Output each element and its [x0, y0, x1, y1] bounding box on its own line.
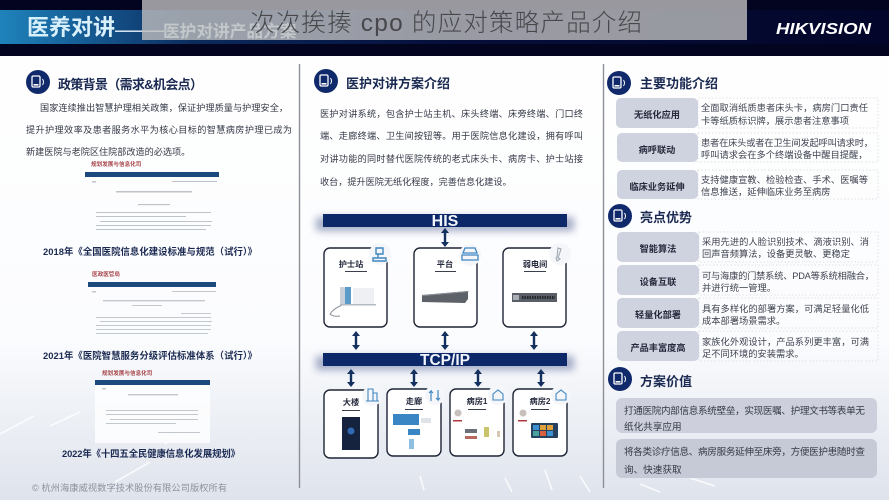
document 2018 — [85, 160, 219, 230]
box: corridor — [387, 385, 445, 456]
architecture diagram — [316, 213, 574, 458]
row: lightweight deployment: 成本部署场景需求。 — [702, 315, 785, 326]
header banner — [0, 0, 889, 56]
row: clinical extension: 临床业务延伸 — [629, 181, 685, 192]
arrow: network to TCP/IP — [530, 331, 538, 350]
document 2022 — [95, 369, 210, 443]
policy paragraph — [26, 102, 292, 157]
panel: main functions — [607, 71, 878, 199]
row: smart algorithm: 智能算法 — [640, 243, 676, 254]
arrow: TCP/IP to ward 2 — [537, 369, 545, 387]
panel: solution value — [608, 367, 877, 478]
row: device interconnection: 可与海康的门禁系统、PDA等系统相融合， — [702, 270, 874, 281]
header connector line — [115, 30, 164, 32]
TCP/IP bar: TCP/IP — [420, 352, 470, 369]
row: call linkage: 病呼联动 — [639, 144, 675, 155]
policy paragraph: 国家连续推出智慧护理相关政策，保证护理质量与护理安全， — [40, 102, 288, 113]
arrow: TCP/IP to ward 1 — [474, 369, 482, 387]
icon: highlights device — [608, 204, 632, 228]
value card: extend services: 询、快速获取 — [624, 464, 682, 476]
HIKVISION logo: HIKVISION — [776, 21, 872, 38]
document 2021: 医政医管局 — [92, 270, 120, 278]
row: smart algorithm: 回声音频算法，设备更灵敏、更稳定 — [702, 248, 850, 259]
row: call linkage: 呼叫请求会在多个终端设备中醒目提醒， — [701, 149, 868, 160]
box: corridor: 走廊 — [406, 396, 422, 406]
caption 2022: 2022年《十四五全民健康信息化发展规划》 — [62, 448, 240, 459]
policy paragraph: 提升护理效率及患者服务水平为核心目标的智慧病房护理已成为 — [26, 124, 292, 135]
box: platform: 平台 — [437, 259, 453, 269]
value card: break data silos: 纸化共享应用 — [624, 421, 682, 433]
panel: policy background — [26, 70, 292, 459]
row: paperless application — [616, 98, 878, 128]
value card: break data silos: 打通医院内部信息系统壁垒，实现医嘱、护理文书等表单无 — [624, 405, 865, 417]
column dividers — [300, 64, 604, 488]
solution paragraph — [320, 108, 583, 187]
panel: solution introduction — [314, 69, 583, 458]
arrow: HIS to platform — [441, 228, 449, 247]
row: call linkage: 患者在床头或者在卫生间发起呼叫请求时， — [701, 137, 873, 148]
value card: extend services — [616, 439, 877, 478]
overlay title bar — [142, 0, 747, 40]
row: clinical extension: 信息推送，延伸临床业务至病房 — [701, 186, 830, 197]
icon: value device — [608, 367, 632, 391]
box: nurse station: 护士站 — [339, 259, 363, 269]
value card: break data silos — [616, 398, 877, 433]
icon: policy device — [26, 70, 50, 94]
copyright footer: © 杭州海康威视数字技术股份有限公司版权所有 — [32, 482, 227, 493]
overlay title bar: 次次挨揍 cpo 的应对策略产品介绍 — [250, 9, 642, 37]
policy paragraph: 新建医院与老院区住院部改造的必选项。 — [26, 146, 190, 157]
heading: main functions: 主要功能介绍 — [640, 76, 718, 91]
row: lightweight deployment: 具有多样化的部署方案，可满足轻量化低 — [702, 303, 869, 314]
arrow: platform to TCP/IP — [441, 331, 449, 350]
box: ward 1 — [450, 385, 508, 456]
heading: solution introduction: 医护对讲方案介绍 — [346, 76, 450, 91]
caption 2021: 2021年《医院智慧服务分级评估标准体系（试行）》 — [43, 350, 257, 361]
row: lightweight deployment: 轻量化部署 — [635, 309, 681, 320]
row: device interconnection — [617, 265, 878, 295]
header subtitle: 医护对讲产品方案 — [163, 21, 297, 41]
header main title: 医养对讲 — [27, 15, 115, 40]
row: device interconnection: 设备互联 — [640, 276, 676, 287]
row: paperless application: 全面取消纸质患者床头卡，病房门口责任 — [701, 102, 868, 113]
solution paragraph: 对讲功能的同时替代医院传统的老式床头卡、病房卡、护士站接 — [320, 153, 583, 164]
box: weak current network: 弱电间 — [523, 259, 547, 269]
solution paragraph: 医护对讲系统，包含护士站主机、床头终端、床旁终端、门口终 — [320, 108, 583, 119]
heading: policy background: 政策背景（需求&机会点） — [58, 77, 203, 92]
row: call linkage — [617, 133, 878, 162]
row: paperless application: 卡等纸质标识牌，展示患者注意事项 — [701, 115, 849, 126]
arrow: nurse station to TCP/IP — [352, 331, 360, 350]
heading: solution value: 方案价值 — [640, 374, 692, 389]
solution paragraph: 端、走廊终端、卫生间按钮等。用于医院信息化建设，拥有呼叫 — [320, 130, 583, 141]
box: ward 2 — [513, 385, 571, 456]
value card: extend services: 将各类诊疗信息、病房服务延伸至床旁，方便医护患随时查 — [624, 446, 865, 458]
document 2018: 规划发展与信息化司 — [91, 160, 142, 168]
box: weak current network — [503, 243, 571, 327]
document 2022: 规划发展与信息化司 — [102, 369, 153, 377]
row: clinical extension — [617, 170, 878, 199]
heading: highlights: 亮点优势 — [640, 210, 692, 225]
caption 2018: 2018年《全国医院信息化建设标准与规范（试行）》 — [43, 246, 257, 257]
panel: highlights — [608, 204, 878, 361]
document 2021 — [88, 270, 216, 334]
row: clinical extension: 支持健康宣教、检验检查、手术、医嘱等 — [701, 174, 868, 185]
row: device interconnection: 并进行统一管理。 — [702, 282, 776, 293]
row: rich product range — [617, 331, 878, 361]
row: paperless application: 无纸化应用 — [634, 109, 680, 120]
icon: solution device — [314, 69, 338, 93]
row: smart algorithm: 采用先进的人脸识别技术、滴液识别、消 — [702, 236, 869, 247]
row: rich product range: 家族化外观设计，产品系列更丰富，可满 — [702, 336, 869, 347]
box: building — [324, 386, 382, 458]
row: rich product range: 足不同环境的安装需求。 — [702, 348, 804, 359]
box: ward 1: 病房1 — [467, 396, 488, 406]
background light streaks — [0, 412, 840, 492]
HIS bar: HIS — [432, 213, 459, 230]
arrow: TCP/IP to building — [347, 369, 355, 387]
solution paragraph: 收台，提升医院无纸化程度，完善信息化建设。 — [320, 176, 512, 187]
icon: functions device — [607, 71, 631, 95]
box: nurse station — [324, 243, 391, 327]
HIS bar — [316, 213, 574, 231]
box: ward 2: 病房2 — [530, 396, 551, 406]
arrow: TCP/IP to corridor — [410, 369, 418, 387]
row: rich product range: 产品丰富度高 — [630, 342, 686, 353]
row: smart algorithm — [617, 232, 878, 262]
TCP/IP bar — [316, 352, 574, 370]
box: building: 大楼 — [343, 397, 359, 407]
box: platform — [414, 244, 481, 327]
row: lightweight deployment — [617, 298, 878, 328]
